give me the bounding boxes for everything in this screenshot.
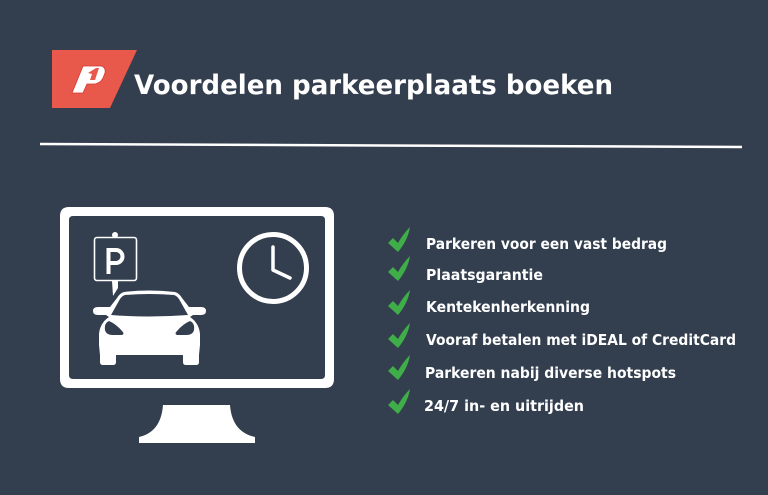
check 3: [388, 290, 410, 315]
check 6: [388, 389, 410, 414]
benefit 2: Plaatsgarantie: [426, 266, 543, 284]
benefit 6: 24/7 in- en uitrijden: [424, 397, 584, 415]
icon: parking sign: [94, 232, 136, 296]
icon: monitor: [60, 207, 334, 443]
benefit 4: Vooraf betalen met iDEAL of CreditCard: [426, 331, 736, 349]
title: Voordelen parkeerplaats boeken: [134, 70, 613, 101]
icon: car: [93, 290, 206, 365]
check 5: [388, 355, 410, 380]
benefit 3: Kentekenherkenning: [426, 298, 590, 316]
check 4: [388, 323, 410, 348]
icon: clock: [240, 234, 306, 302]
check 1: [388, 227, 410, 252]
benefit 1: Parkeren voor een vast bedrag: [426, 235, 667, 253]
logo: [52, 50, 137, 108]
benefits list: [388, 227, 736, 415]
check 2: [388, 256, 410, 281]
benefit 5: Parkeren nabij diverse hotspots: [425, 364, 676, 382]
